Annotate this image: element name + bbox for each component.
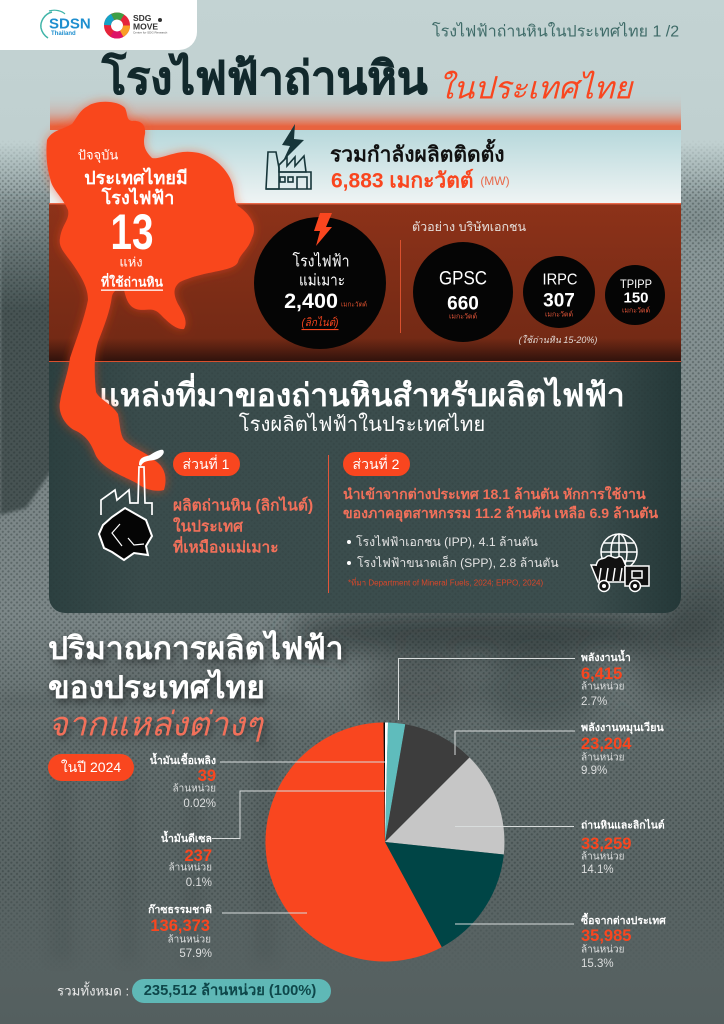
label: imports: ซื้อจากต่างประเทศ <box>581 912 666 927</box>
label: natural gas: 136,373 <box>150 917 210 935</box>
label: fuel oil <box>150 752 216 810</box>
icon: lightning bolt <box>314 213 332 246</box>
text: source note: *ที่มา Department of Mineral Fuels, 2024; EPPO, 2024) <box>348 576 543 588</box>
text: bullet list: โรงไฟฟ้าขนาดเล็ก (SPP), 2.8 ล้านตัน <box>357 555 559 570</box>
heading: coal sources: แหล่งที่มาของถ่านหินสำหรับผลิตไฟฟ้า <box>99 373 625 413</box>
text: Thailand has 13 coal plants: โรงไฟฟ้า <box>101 187 174 208</box>
text: Thailand has 13 coal plants: ประเทศไทยมี <box>84 167 188 188</box>
divider <box>400 240 401 333</box>
heading: electricity production <box>48 630 344 744</box>
text: bullet list <box>347 535 559 570</box>
leader lines <box>212 658 575 924</box>
total: 235,512 ล้านหน่วย (100%) <box>144 982 316 999</box>
part 2 badge: ส่วนที่ 2 <box>353 455 400 472</box>
logo: SDSN Thailand: Thailand <box>51 31 76 37</box>
chart: Mae Moh circle: แม่เมาะ <box>299 272 345 290</box>
divider <box>328 455 329 593</box>
chart: Mae Moh circle <box>254 217 386 349</box>
text: coal share note: (ใช้ถ่านหิน 15-20%) <box>519 334 597 345</box>
badge: year 2024: ในปี 2024 <box>61 759 121 775</box>
label: natural gas <box>148 903 212 960</box>
part 1 badge: ส่วนที่ 1 <box>183 455 230 472</box>
logo: SDG Move: MOVE <box>133 22 158 32</box>
part 1 badge <box>173 452 240 476</box>
label: hydropower <box>581 649 631 708</box>
chart: GPSC circle: เมกะวัตต์ <box>449 312 477 320</box>
label: imports: 35,985 <box>581 927 631 945</box>
chart: Mae Moh circle: โรงไฟฟ้า <box>292 252 350 270</box>
label: fuel oil: 39 <box>198 767 216 785</box>
text: private company examples: ตัวอย่าง บริษัทเอกชน <box>412 220 527 234</box>
chart: TPIPP circle: เมกะวัตต์ <box>622 306 650 314</box>
heading: electricity production: จากแหล่งต่างๆ <box>48 706 265 744</box>
panel: coal plants <box>49 203 681 362</box>
chart: TPIPP circle <box>605 265 665 325</box>
header band: fade to orange <box>50 92 681 130</box>
logo: SDG Move: Center for SDG Research <box>133 30 168 34</box>
chart: electricity pie <box>265 722 504 961</box>
text: part 1 description: ผลิตถ่านหิน (ลิกไนต์) <box>173 496 313 514</box>
text: total capacity label: รวมกำลังผลิตติดตั้ง <box>330 138 505 166</box>
label: coal and lignite: 33,259 <box>581 835 631 853</box>
label: diesel: ล้านหน่วย <box>169 862 212 874</box>
label: hydropower: 6,415 <box>581 665 622 683</box>
label: diesel: น้ำมันดีเซล <box>161 830 212 845</box>
title <box>101 52 634 106</box>
label: fuel oil: ล้านหน่วย <box>173 782 216 794</box>
label: coal and lignite: ล้านหน่วย <box>581 850 624 862</box>
title: ในประเทศไทย <box>438 70 634 106</box>
logo: SDSN Thailand <box>41 10 91 38</box>
total <box>57 979 331 1003</box>
chart: IRPC circle <box>523 256 595 328</box>
label: coal and lignite: ถ่านหินและลิกไนต์ <box>581 818 665 832</box>
icon: globe and coal truck <box>591 534 649 592</box>
panel: total installed capacity <box>50 124 681 203</box>
text: part 1 description: ที่เหมืองแม่เมาะ <box>173 536 279 556</box>
label: renewables: พลังงานหมุนเวียน <box>581 721 664 735</box>
chart: IRPC circle: 307 <box>543 290 575 312</box>
label: renewables: ล้านหน่วย <box>581 752 624 764</box>
title: โรงไฟฟ้าถ่านหิน <box>101 52 428 104</box>
label: fuel oil: 0.02% <box>183 798 216 810</box>
label: natural gas: ก๊าซธรรมชาติ <box>148 903 212 916</box>
chart: IRPC circle: IRPC <box>542 272 578 288</box>
chart: Mae Moh circle: (ลิกไนต์) <box>302 316 339 329</box>
logo: SDG Move <box>108 13 168 35</box>
chart: Mae Moh circle: 2,400 <box>284 289 338 313</box>
logo: SDG Move: SDG <box>133 13 152 23</box>
badge: year 2024 <box>48 754 134 781</box>
map of Thailand <box>46 102 254 491</box>
label: renewables <box>581 721 664 777</box>
label: natural gas: ล้านหน่วย <box>168 934 211 946</box>
heading: electricity production: ปริมาณการผลิตไฟฟ้า <box>48 630 344 666</box>
chart: TPIPP circle: TPIPP <box>620 277 652 291</box>
label: coal and lignite: 14.1% <box>581 864 614 876</box>
label: fuel oil: น้ำมันเชื้อเพลิง <box>150 752 216 767</box>
panel: coal sources <box>49 362 681 613</box>
label: imports: ล้านหน่วย <box>581 944 624 956</box>
label: imports <box>581 912 666 970</box>
label: diesel <box>161 830 212 889</box>
part 2 badge <box>343 452 410 476</box>
text: part 2 description: ของภาคอุตสาหกรรม 11.2 ล้านตัน เหลือ 6.9 ล้านตัน <box>343 505 658 522</box>
text: Thailand has 13 coal plants <box>78 148 188 290</box>
label: hydropower: 2.7% <box>581 696 607 708</box>
chart: GPSC circle: 660 <box>447 294 479 314</box>
text: total capacity value: 6,883 เมกะวัตต์ (MW) <box>331 168 510 192</box>
text: Thailand has 13 coal plants: ที่ใช้ถ่านหิน <box>101 272 163 290</box>
text: Thailand has 13 coal plants: ปัจจุบัน <box>78 148 118 164</box>
text: page label: โรงไฟฟ้าถ่านหินในประเทศไทย 1 /2 <box>432 22 679 40</box>
text: part 2 description: นำเข้าจากต่างประเทศ 18.1 ล้านตัน หักการใช้งาน <box>343 485 646 502</box>
chart: GPSC circle <box>413 242 513 342</box>
text: bullet list: โรงไฟฟ้าเอกชน (IPP), 4.1 ล้านตัน <box>356 535 539 549</box>
label: natural gas: 57.9% <box>179 948 212 960</box>
icon: factory with coal <box>99 450 164 560</box>
icon: factory with lightning <box>266 124 311 189</box>
text: part 2 description <box>343 485 658 522</box>
label: diesel: 0.1% <box>186 877 212 889</box>
chart: IRPC circle: เมกะวัตต์ <box>545 310 573 318</box>
label: renewables: 9.9% <box>581 765 607 777</box>
header: logo box <box>0 0 197 50</box>
label: hydropower: พลังงานน้ำ <box>581 649 631 664</box>
label: coal and lignite <box>581 818 665 876</box>
label: diesel: 237 <box>184 847 212 865</box>
subheading: โรงผลิตไฟฟ้าในประเทศไทย <box>239 412 485 436</box>
text: Thailand has 13 coal plants: 13 <box>110 204 154 260</box>
text: Thailand has 13 coal plants: แห่ง <box>119 254 143 270</box>
heading: electricity production: ของประเทศไทย <box>48 669 265 705</box>
logo: SDSN Thailand: SDSN <box>49 16 91 32</box>
chart: TPIPP circle: 150 <box>623 290 649 306</box>
label: hydropower: ล้านหน่วย <box>581 680 624 692</box>
text: part 1 description <box>173 496 313 556</box>
label: imports: 15.3% <box>581 958 614 970</box>
chart: GPSC circle: GPSC <box>439 268 487 290</box>
text: part 1 description: ในประเทศ <box>173 516 244 536</box>
label: renewables: 23,204 <box>581 735 632 753</box>
total: รวมทั้งหมด : <box>57 982 129 998</box>
chart: Mae Moh circle: เมกะวัตต์ <box>341 300 367 308</box>
